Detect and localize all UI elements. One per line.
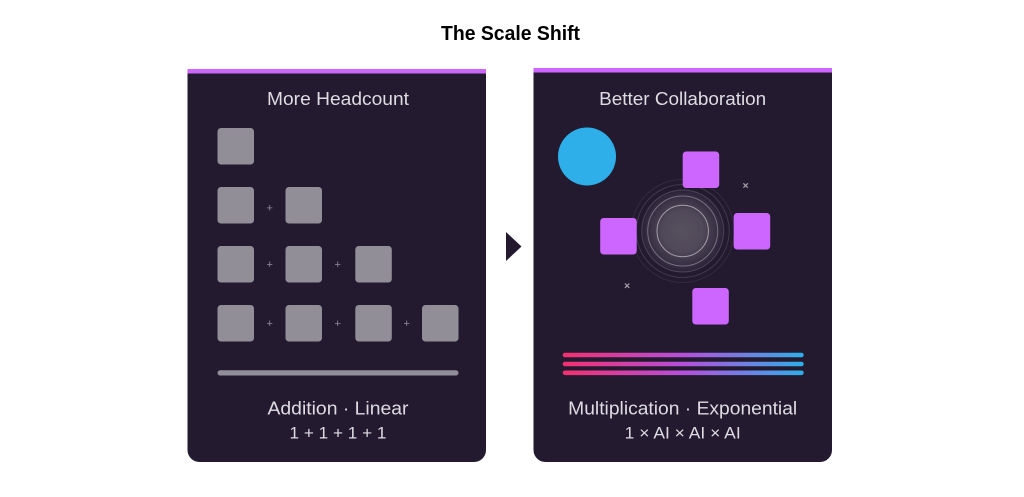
title: The Scale Shift [441, 23, 580, 45]
formula: addition: 1 + 1 + 1 + 1 [290, 424, 386, 442]
plus signs: + [403, 318, 410, 330]
plus signs [266, 202, 410, 330]
plus signs: + [266, 259, 273, 271]
squares grid [218, 128, 458, 342]
caption: multiplication exponential: Multiplication · Exponential [568, 398, 797, 418]
heading: more headcount: More Headcount [267, 89, 409, 109]
gradient lines [563, 353, 804, 375]
arrow [506, 232, 522, 261]
panel accent bar [188, 69, 486, 74]
panel: more headcount [188, 69, 486, 462]
panel: better collaboration [534, 68, 832, 462]
central hub rings [631, 180, 734, 282]
heading: better collaboration: Better Collaboration [599, 89, 766, 109]
plus signs: + [334, 259, 341, 271]
plus signs: + [266, 202, 273, 214]
blue circle [558, 128, 616, 186]
plus signs: + [334, 318, 341, 330]
panel accent bar [534, 68, 832, 72]
linear progress bar [218, 370, 458, 376]
caption: addition linear: Addition · Linear [268, 398, 408, 418]
plus signs: + [266, 318, 273, 330]
multiply marks [625, 183, 748, 288]
purple squares [600, 152, 770, 324]
formula: multiplication: 1 × AI × AI × AI [625, 424, 741, 442]
